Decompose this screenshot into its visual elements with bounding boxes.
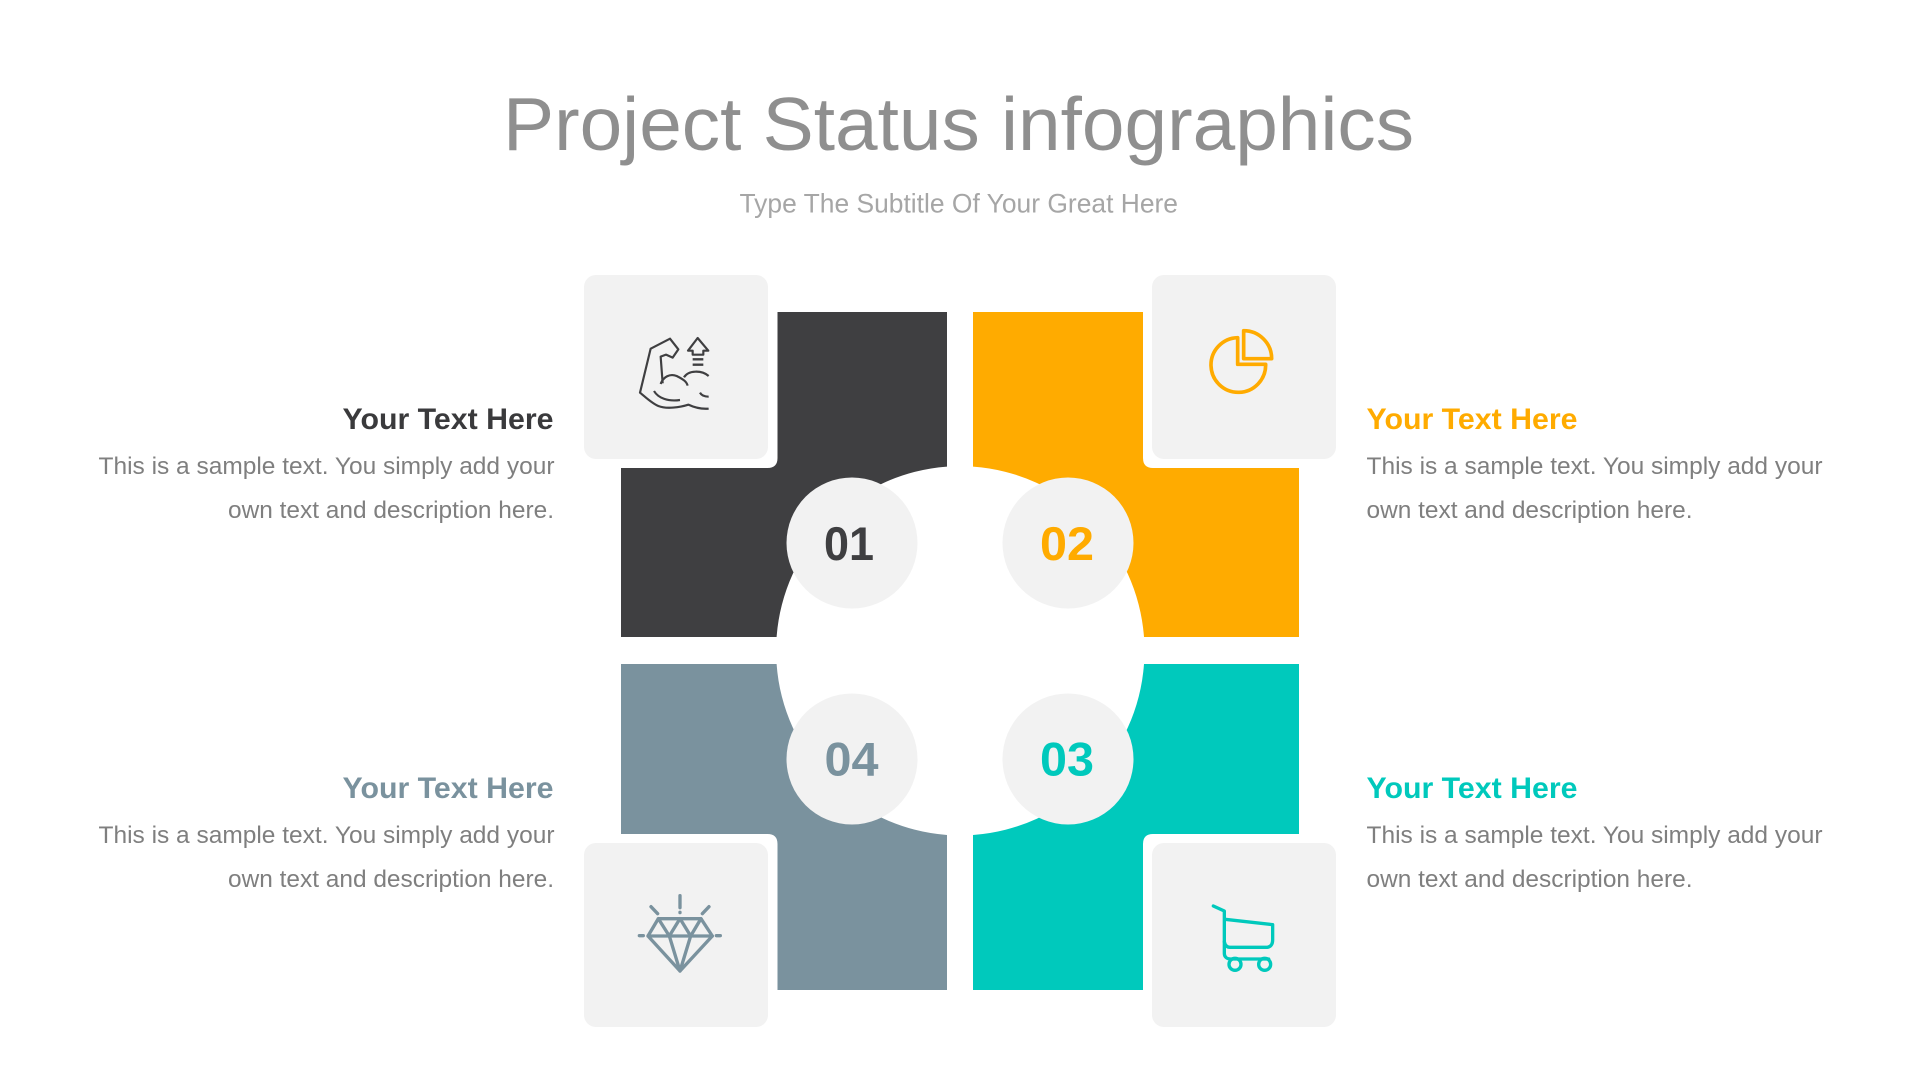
text block 01: own text and description here. (228, 497, 554, 524)
icon card 03 (1152, 843, 1336, 1027)
number badge 01 (786, 478, 918, 608)
text block 02 (1366, 403, 1822, 524)
number badge 02: 02 (1040, 517, 1094, 570)
title: Project Status infographics (503, 82, 1414, 166)
text block 04: Your Text Here (342, 772, 554, 805)
icon: flexed arm with up arrow (640, 338, 709, 409)
icon: diamond (639, 896, 720, 971)
icon card 01 (584, 275, 768, 459)
panel: quadrant 03 teal shape (973, 664, 1299, 990)
text block 03: own text and description here. (1366, 866, 1692, 893)
icon card 04 (584, 843, 768, 1027)
icon: pie chart (1211, 331, 1272, 392)
text block 04: This is a sample text. You simply add your (98, 822, 554, 849)
text block 02: own text and description here. (1366, 497, 1692, 524)
text block 04: own text and description here. (228, 866, 554, 893)
number badge 01: 01 (824, 517, 874, 570)
text block 01: This is a sample text. You simply add your (98, 453, 554, 480)
text block 02: Your Text Here (1366, 403, 1578, 436)
text block 01 (98, 403, 554, 524)
icon card 02 (1152, 275, 1336, 459)
icon: shopping cart (1213, 906, 1273, 970)
text block 03: This is a sample text. You simply add your (1366, 822, 1822, 849)
number badge 04 (786, 694, 918, 824)
text block 03 (1366, 772, 1822, 893)
text block 02: This is a sample text. You simply add your (1366, 453, 1822, 480)
number badge 02 (1002, 478, 1134, 608)
number badge 03 (1002, 694, 1134, 824)
subtitle: Type The Subtitle Of Your Great Here (740, 188, 1178, 218)
panel: quadrant 04 slate shape (621, 664, 947, 990)
number badge 03: 03 (1040, 732, 1094, 786)
text block 04 (98, 772, 554, 893)
number badge 04: 04 (824, 732, 878, 786)
panel: quadrant 02 orange shape (973, 312, 1299, 637)
text block 03: Your Text Here (1366, 772, 1578, 805)
text block 01: Your Text Here (342, 403, 554, 436)
panel: quadrant 01 dark shape (621, 312, 947, 637)
